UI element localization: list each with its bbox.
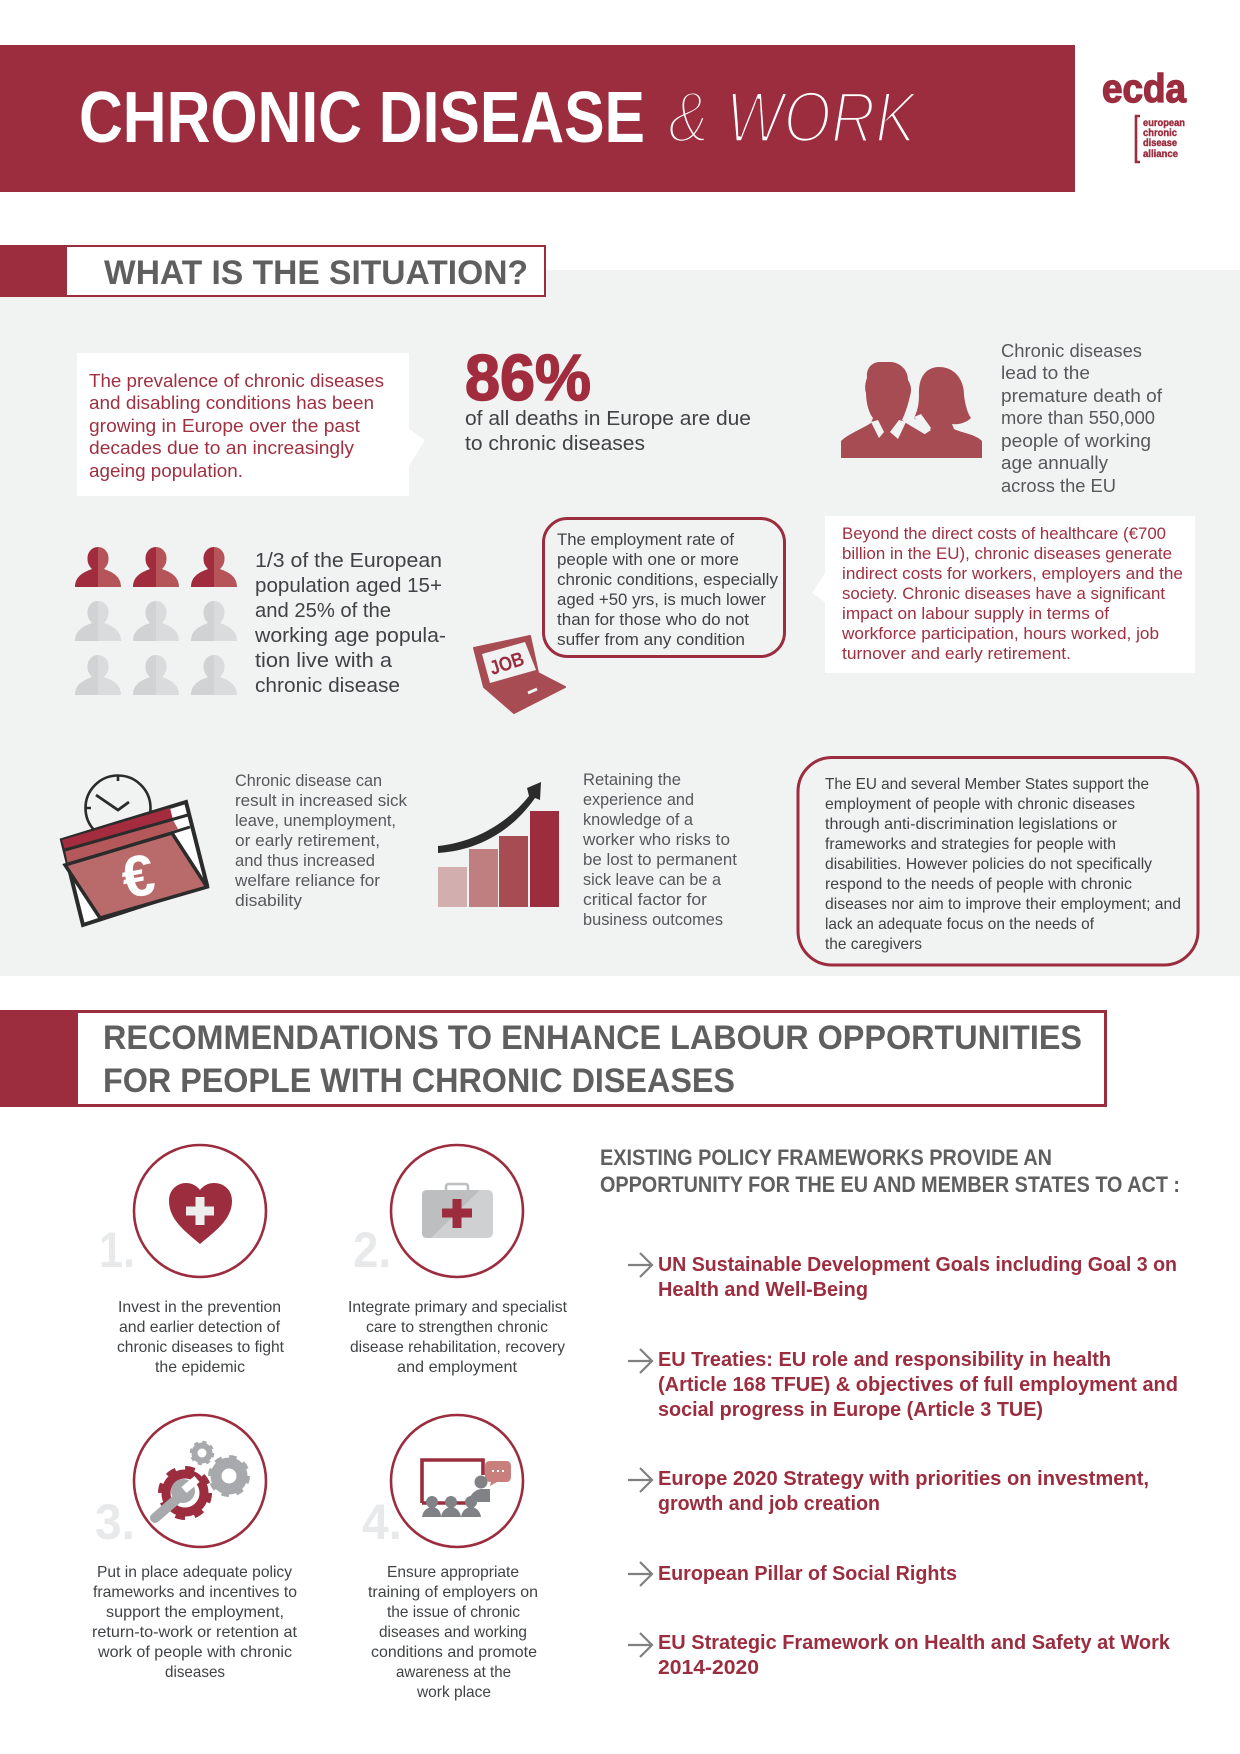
text: premature death: Chronic diseases	[1001, 340, 1142, 361]
recommendation 1: Invest in the prevention	[118, 1299, 281, 1316]
recommendation 2: care to strengthen chronic	[366, 1319, 548, 1336]
recommendation 2: disease rehabilitation, recovery	[350, 1339, 565, 1356]
text: premature death: people of working	[1001, 430, 1151, 451]
logo: ecda: disease	[1143, 138, 1177, 149]
recommendation 3: frameworks and incentives to	[93, 1584, 297, 1601]
policy item: UN goals	[628, 1253, 1177, 1301]
recommendation 1: the epidemic	[155, 1359, 245, 1376]
logo: ecda: ecda	[1102, 67, 1187, 111]
logo: ecda: alliance	[1143, 149, 1178, 160]
callout: employment rate: chronic conditions, especially	[557, 571, 779, 589]
recommendation 4: diseases and working	[379, 1624, 527, 1641]
text: sick leave: leave, unemployment,	[235, 812, 396, 830]
text: premature death: premature death of	[1001, 385, 1163, 406]
text: one third of population: working age popula-	[254, 625, 446, 647]
text: premature death: lead to the	[1001, 362, 1090, 383]
policy item: Europe 2020: Europe 2020 Strategy with priorities on investment,	[658, 1468, 1149, 1490]
policy item: UN goals: UN Sustainable Development Goals including Goal 3 on	[658, 1254, 1177, 1276]
recommendation 1: and earlier detection of	[119, 1319, 281, 1336]
recommendation 3	[92, 1415, 298, 1681]
callout: EU and member states	[798, 758, 1198, 965]
callout: indirect costs	[812, 516, 1195, 673]
logo: ecda	[1102, 67, 1187, 162]
logo: ecda: european	[1143, 118, 1185, 129]
heading: existing policy frameworks: EXISTING POLICY FRAMEWORKS PROVIDE AN	[600, 1145, 1052, 1170]
title banner: & WORK	[668, 78, 919, 158]
policy item: EU treaties: (Article 168 TFUE) & objectives of full employment and	[658, 1374, 1178, 1396]
text: retaining experience: experience and	[583, 791, 694, 809]
text: one third of population: chronic disease	[255, 675, 400, 697]
panel: what is the situation background	[0, 270, 1240, 976]
heading: recommendations	[0, 1010, 1107, 1107]
text: premature death: more than 550,000	[1001, 407, 1155, 428]
recommendation 2: and employment	[397, 1359, 518, 1376]
callout: EU and member states: disabilities. However policies do not specifically	[825, 856, 1152, 873]
text: retaining experience: Retaining the	[583, 771, 681, 789]
text: sick leave: Chronic disease can	[235, 772, 382, 790]
text: retaining experience: worker who risks to	[582, 831, 730, 849]
icon: couple silhouette	[841, 362, 982, 458]
text: sick leave: or early retirement,	[235, 832, 380, 850]
text: premature death: across the EU	[1001, 475, 1116, 496]
recommendation 2: 2.	[353, 1222, 391, 1278]
recommendation 3: support the employment,	[106, 1604, 284, 1621]
policy item: health and safety framework: EU Strategic Framework on Health and Safety at Work	[658, 1632, 1171, 1654]
heading: existing policy frameworks	[600, 1145, 1180, 1197]
text: sick leave: welfare reliance for	[234, 872, 381, 890]
stat: 86 percent	[465, 341, 751, 455]
recommendation 2: Integrate primary and specialist	[348, 1299, 568, 1316]
callout: indirect costs: workforce participation, hours worked, job	[841, 625, 1159, 643]
recommendation 3: work of people with chronic	[97, 1644, 292, 1661]
callout: prevalence: and disabling conditions has been	[89, 393, 374, 413]
text: sick leave	[234, 772, 408, 910]
callout: indirect costs: turnover and early retirement.	[842, 645, 1071, 663]
stat: 86 percent: 86%	[465, 341, 591, 414]
logo: ecda: chronic	[1143, 128, 1177, 139]
text: retaining experience	[582, 771, 737, 929]
heading: existing policy frameworks: OPPORTUNITY FOR THE EU AND MEMBER STATES TO ACT :	[600, 1172, 1180, 1197]
callout: prevalence	[77, 353, 425, 496]
callout: EU and member states: employment of people with chronic diseases	[825, 796, 1135, 813]
recommendation 1: chronic diseases to fight	[117, 1339, 285, 1356]
recommendation 3: diseases	[165, 1664, 225, 1681]
policy item: UN goals: Health and Well-Being	[658, 1279, 868, 1301]
icon: wallet with clock and euro: €	[117, 842, 160, 911]
callout: EU and member states: diseases nor aim to improve their employment; and	[825, 896, 1181, 913]
text: one third of population: population aged 15+	[255, 575, 442, 597]
callout: prevalence: decades due to an increasingly	[89, 438, 354, 458]
policy item: health and safety framework: 2014-2020	[658, 1657, 759, 1679]
stat: 86 percent: to chronic diseases	[465, 433, 645, 455]
callout: employment rate: suffer from any condition	[557, 631, 745, 649]
callout: indirect costs: billion in the EU), chronic diseases generate	[842, 545, 1172, 563]
text: sick leave: and thus increased	[235, 852, 375, 870]
callout: prevalence: ageing population.	[89, 461, 243, 481]
callout: prevalence: The prevalence of chronic diseases	[89, 371, 384, 391]
policy item: Europe 2020	[628, 1468, 1149, 1515]
heading: recommendations: FOR PEOPLE WITH CHRONIC DISEASES	[103, 1062, 735, 1100]
text: one third of population: and 25% of the	[255, 600, 391, 622]
callout: EU and member states: The EU and several Member States support the	[825, 776, 1149, 793]
callout: employment rate: aged +50 yrs, is much lower	[557, 591, 767, 609]
recommendation 1	[99, 1145, 285, 1376]
callout: employment rate: The employment rate of	[557, 531, 734, 549]
callout: indirect costs: society. Chronic diseases have a significant	[842, 585, 1165, 603]
icon: laptop job	[474, 636, 565, 713]
text: retaining experience: business outcomes	[583, 911, 723, 929]
text: retaining experience: knowledge of a	[583, 811, 694, 829]
recommendation 4: work place	[416, 1684, 491, 1701]
title banner: CHRONIC DISEASE	[79, 78, 645, 158]
recommendation 4: conditions and promote	[371, 1644, 537, 1661]
text: premature death	[1001, 340, 1163, 496]
icon: laptop job: JOB	[487, 648, 527, 680]
recommendation 3: return-to-work or retention at	[92, 1624, 298, 1641]
policy item: EU treaties	[628, 1349, 1178, 1421]
callout: indirect costs: Beyond the direct costs of healthcare (€700	[842, 525, 1166, 543]
text: sick leave: disability	[235, 892, 303, 910]
callout: EU and member states: lack an adequate focus on the needs of	[825, 916, 1095, 933]
callout: employment rate: people with one or more	[557, 551, 739, 569]
recommendation 3: 3.	[95, 1494, 135, 1550]
text: sick leave: result in increased sick	[235, 792, 408, 810]
heading: what is the situation: WHAT IS THE SITUATION?	[104, 254, 528, 292]
heading: recommendations: RECOMMENDATIONS TO ENHANCE LABOUR OPPORTUNITIES	[103, 1019, 1082, 1057]
text: retaining experience: be lost to permanent	[583, 851, 737, 869]
policy item: Europe 2020: growth and job creation	[658, 1493, 880, 1515]
policy item: EU treaties: social progress in Europe (Article 3 TUE)	[658, 1399, 1043, 1421]
text: premature death: age annually	[1001, 452, 1109, 473]
callout: employment rate: than for those who do not	[557, 611, 749, 629]
policy item: European Pillar: European Pillar of Social Rights	[658, 1563, 957, 1585]
callout: EU and member states: the caregivers	[825, 936, 922, 953]
callout: EU and member states: frameworks and strategies for people with	[825, 836, 1116, 853]
icon: wallet with clock and euro	[62, 776, 207, 925]
recommendation 4: 4.	[362, 1494, 402, 1550]
bar chart: rising bars with arrow	[438, 782, 559, 907]
recommendation 1: 1.	[99, 1222, 135, 1278]
policy item: EU treaties: EU Treaties: EU role and responsibility in health	[658, 1349, 1111, 1371]
callout: EU and member states: through anti-discrimination legislations or	[825, 816, 1118, 833]
callout: EU and member states: respond to the needs of people with chronic	[825, 876, 1132, 893]
stat: 86 percent: of all deaths in Europe are due	[465, 408, 751, 430]
recommendation 4: training of employers on	[368, 1584, 538, 1601]
text: retaining experience: sick leave can be a	[583, 871, 722, 889]
text: one third of population	[254, 550, 446, 697]
callout: prevalence: growing in Europe over the past	[89, 416, 360, 436]
title banner	[0, 45, 1075, 192]
heading: what is the situation	[0, 245, 546, 297]
text: retaining experience: critical factor for	[583, 891, 708, 909]
policy item: health and safety framework	[628, 1632, 1171, 1679]
text: one third of population: 1/3 of the European	[255, 550, 442, 572]
recommendation 4: awareness at the	[396, 1664, 511, 1681]
recommendation 3: Put in place adequate policy	[97, 1564, 292, 1581]
text: one third of population: tion live with a	[255, 650, 393, 672]
callout: employment rate	[544, 518, 784, 656]
callout: indirect costs: impact on labour supply in terms of	[842, 605, 1109, 623]
recommendation 4	[362, 1415, 538, 1701]
callout: indirect costs: indirect costs for workers, employers and the	[842, 565, 1183, 583]
recommendation 2	[348, 1145, 568, 1376]
recommendation 4: Ensure appropriate	[387, 1564, 519, 1581]
icon grid: people one third highlighted	[75, 547, 237, 695]
recommendation 4: the issue of chronic	[387, 1604, 520, 1621]
